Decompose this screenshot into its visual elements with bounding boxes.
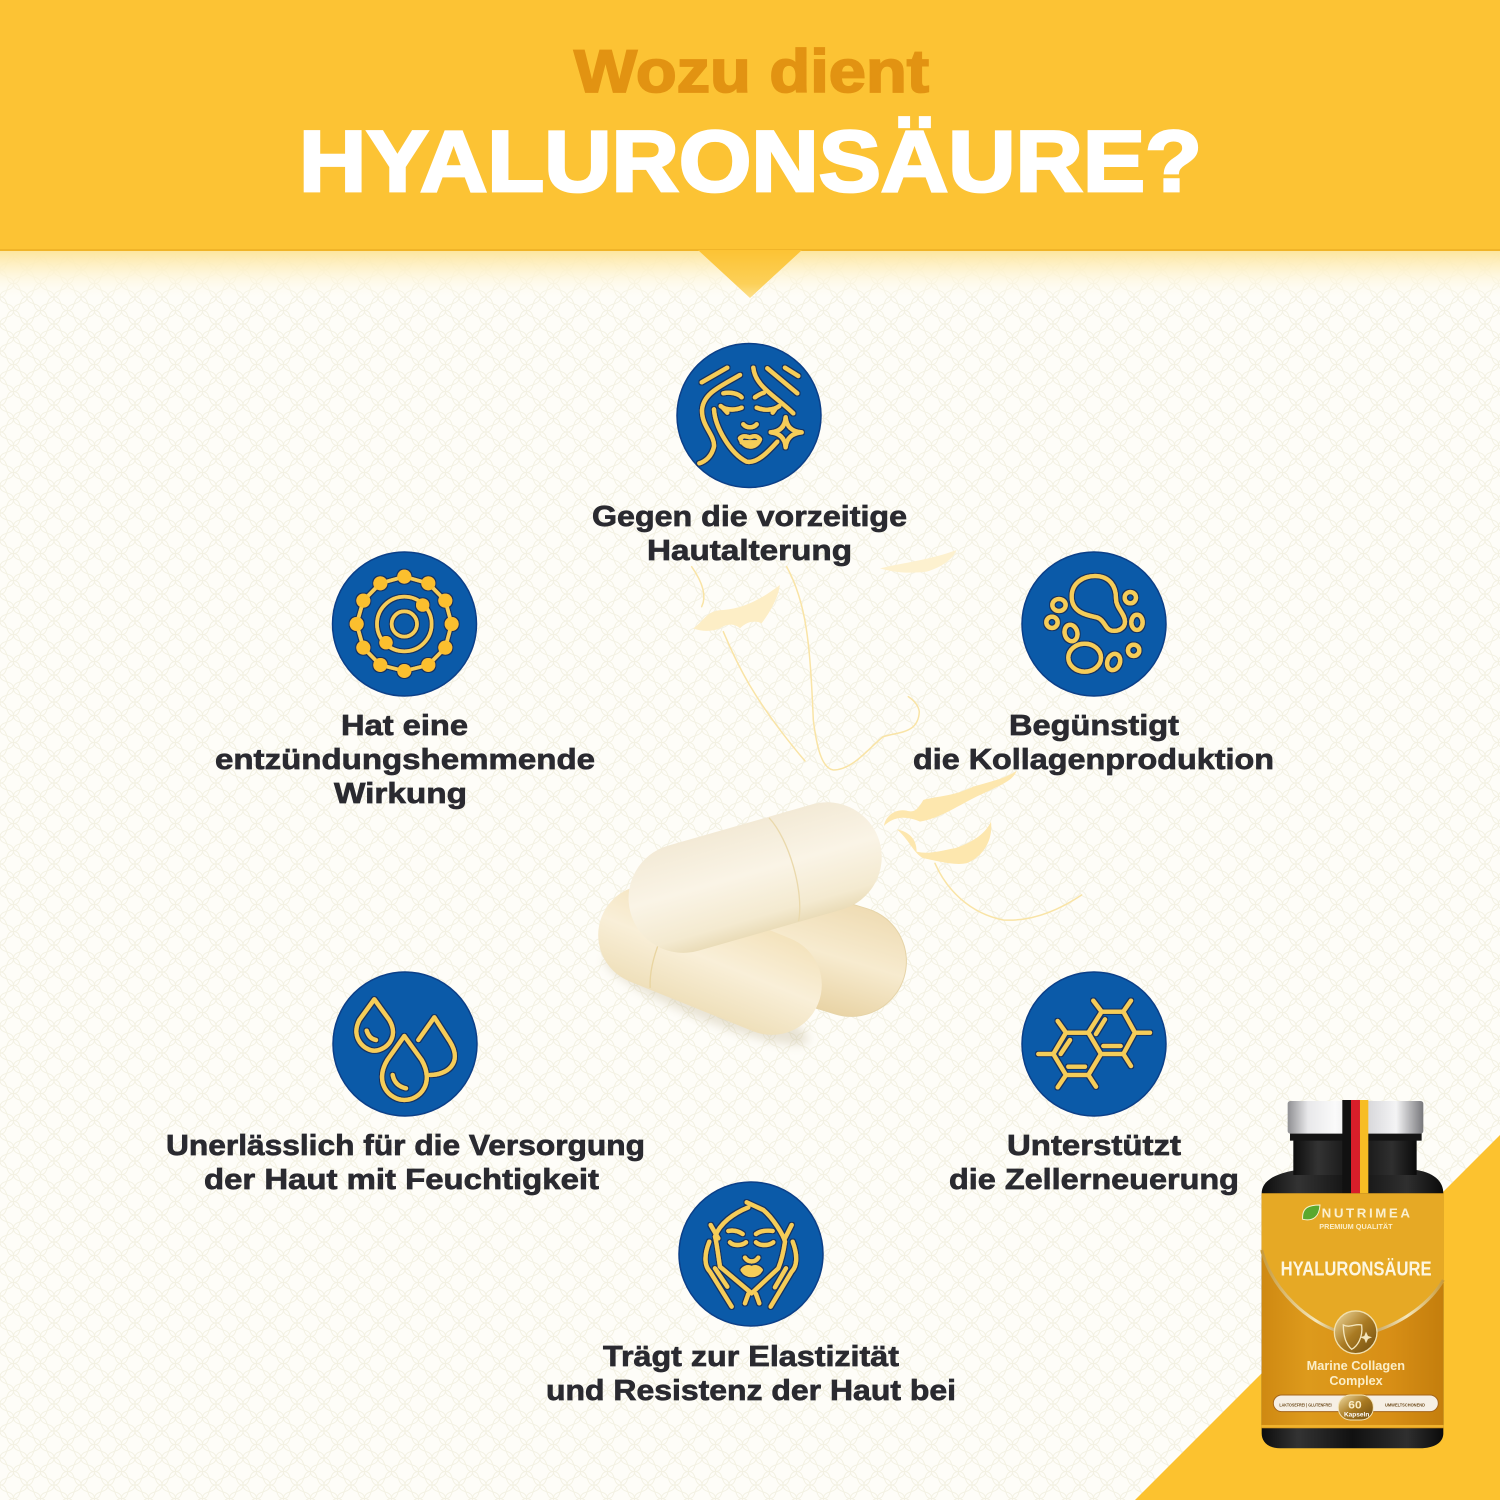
label: collagen: Begünstigt bbox=[1009, 710, 1180, 742]
benefit: hydration bbox=[166, 972, 645, 1196]
label: anti-inflammatory: entzündungshemmende bbox=[215, 744, 595, 776]
label: skin aging: Hautalterung bbox=[647, 535, 852, 567]
label: cell renewal: die Zellerneuerung bbox=[949, 1164, 1239, 1196]
corner triangle bbox=[1135, 1135, 1500, 1500]
product subtitle: Marine Collagen bbox=[1307, 1359, 1405, 1373]
heading: Hyaluronsäure: HYALURONSÄURE? bbox=[299, 114, 1202, 210]
capsule: right bbox=[716, 872, 920, 1030]
label: anti-inflammatory: Hat eine bbox=[341, 710, 468, 742]
label pills bbox=[1273, 1395, 1438, 1420]
icon: face with sparkle bbox=[677, 344, 821, 488]
label: hydration: Unerlässlich für die Versorgung bbox=[166, 1130, 645, 1162]
icon: molecule ring bbox=[332, 552, 476, 696]
label pills: LAKTOSEFREI | GLUTENFREI bbox=[1279, 1403, 1332, 1408]
header notch arrow bbox=[698, 250, 802, 298]
brand name: NUTRIMEA bbox=[1322, 1205, 1410, 1220]
benefit: skin aging bbox=[592, 344, 907, 567]
label: hydration: der Haut mit Feuchtigkeit bbox=[204, 1164, 600, 1196]
capsules image bbox=[583, 789, 920, 1060]
label: cell renewal: Unterstützt bbox=[1007, 1130, 1182, 1162]
capsule: top bbox=[616, 789, 895, 966]
benefit: anti-inflammatory bbox=[215, 552, 595, 810]
label pills: Kapseln bbox=[1344, 1413, 1370, 1419]
benefit: elasticity bbox=[546, 1182, 956, 1407]
label: hydration bbox=[166, 1130, 645, 1196]
label: anti-inflammatory: Wirkung bbox=[334, 778, 467, 810]
label: cell renewal bbox=[949, 1130, 1239, 1196]
heading: Wozu dient: Wozu dient bbox=[574, 38, 929, 105]
capsule: lower bbox=[583, 870, 837, 1050]
product subtitle bbox=[1307, 1359, 1405, 1388]
logo leaf bbox=[1303, 1205, 1320, 1220]
product subtitle: Complex bbox=[1329, 1374, 1383, 1388]
benefit: cell renewal bbox=[949, 972, 1239, 1196]
label: elasticity bbox=[546, 1341, 956, 1407]
icon: water drops bbox=[333, 972, 477, 1116]
product name: HYALURONSÄURE bbox=[1281, 1258, 1432, 1281]
decorative face line art bbox=[692, 550, 1082, 920]
label: elasticity: und Resistenz der Haut bei bbox=[546, 1375, 956, 1407]
label: skin aging bbox=[592, 501, 907, 567]
label pills: UMWELTSCHONEND bbox=[1385, 1403, 1426, 1408]
icon: cells bbox=[1022, 552, 1166, 696]
label: collagen: die Kollagenproduktion bbox=[913, 744, 1274, 776]
icon: face with hands bbox=[679, 1182, 823, 1326]
product bottle bbox=[1262, 1100, 1443, 1448]
label pills: 60 bbox=[1348, 1399, 1362, 1411]
label: elasticity: Trägt zur Elastizität bbox=[603, 1341, 900, 1373]
label: collagen bbox=[913, 710, 1274, 776]
label: anti-inflammatory bbox=[215, 710, 595, 810]
label: skin aging: Gegen die vorzeitige bbox=[592, 501, 907, 533]
benefit: collagen bbox=[913, 552, 1274, 776]
icon: hexagon molecule bbox=[1022, 972, 1166, 1116]
brand subtitle: PREMIUM QUALITÄT bbox=[1319, 1223, 1393, 1231]
header banner bbox=[0, 0, 1500, 298]
